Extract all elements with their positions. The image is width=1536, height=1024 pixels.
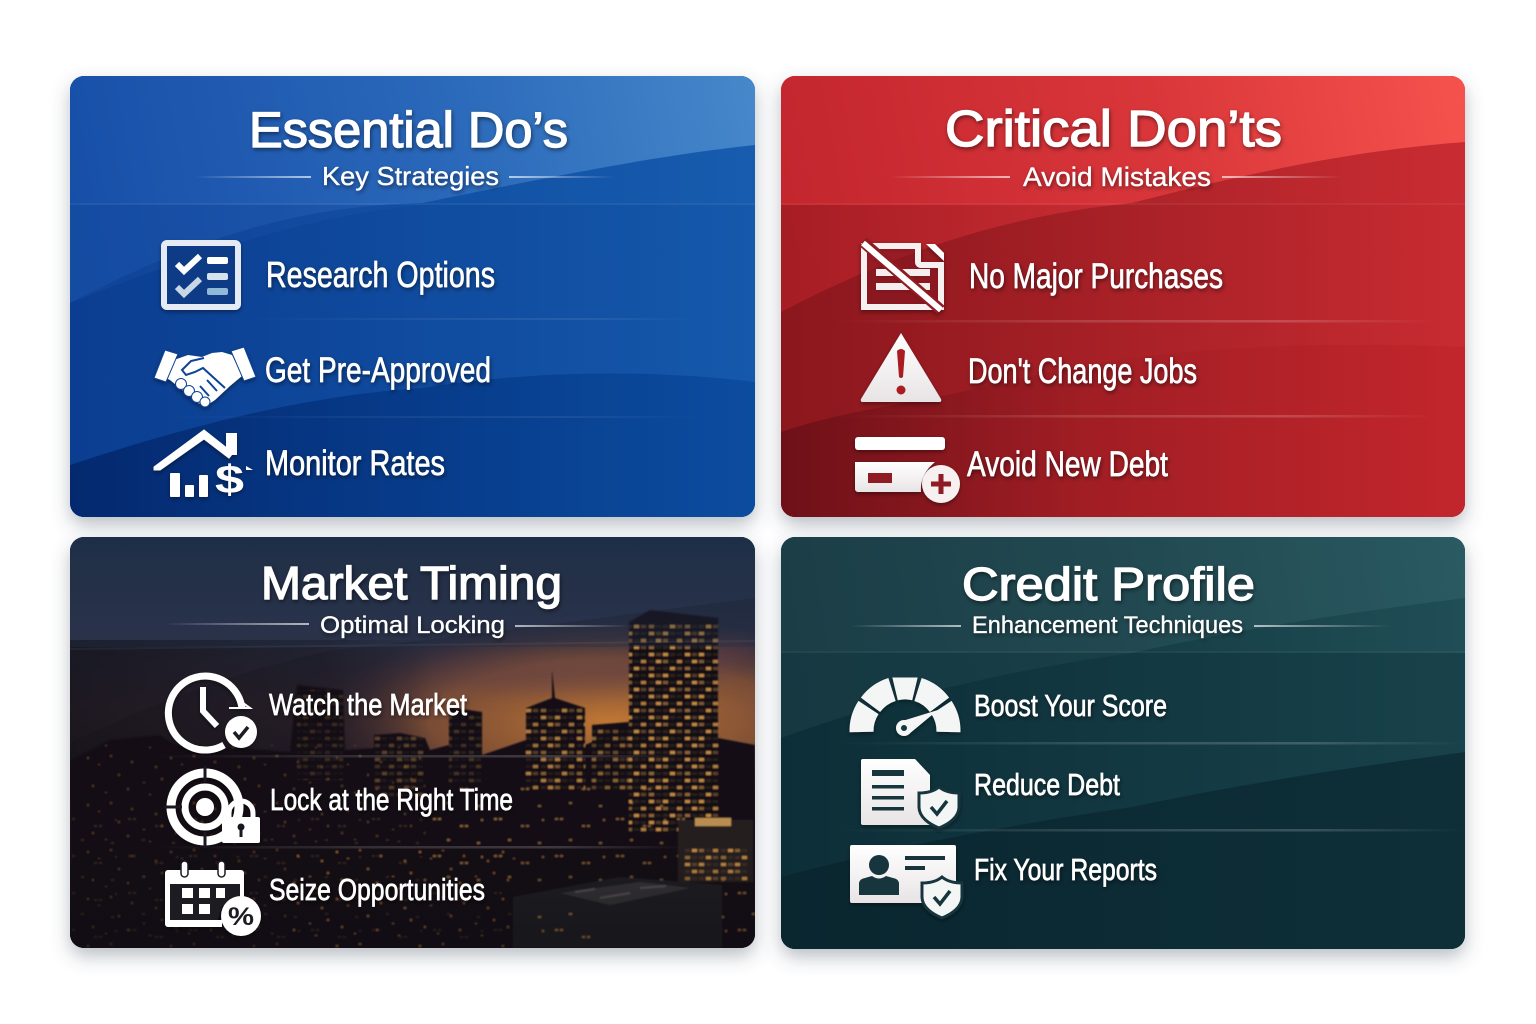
heading: Credit Profile: Credit Profile (962, 558, 1255, 610)
item: Reduce Debt: Reduce Debt (974, 767, 1120, 802)
icon: calendar with percent (165, 861, 261, 936)
panel: Critical Don'ts (781, 76, 1465, 517)
subheading: Key Strategies: Key Strategies (322, 161, 499, 191)
icon: target with padlock (164, 766, 260, 848)
icon: crossed-out document (863, 242, 944, 310)
icon: credit score gauge (861, 687, 949, 736)
icon: calendar with percent: % (228, 903, 254, 931)
item: Watch the Market: Watch the Market (269, 687, 467, 722)
city skyline photo (70, 537, 755, 948)
item: Lock at the Right Time: Lock at the Right Time (270, 782, 513, 817)
heading: Market Timing: Market Timing (261, 557, 562, 609)
item: Research Options: Research Options (266, 254, 495, 295)
icon: house with rates (154, 430, 253, 502)
item: Monitor Rates: Monitor Rates (265, 444, 445, 483)
subheading: Avoid Mistakes: Avoid Mistakes (1023, 162, 1211, 192)
item: Get Pre-Approved: Get Pre-Approved (265, 351, 491, 390)
panel: Essential Do's (70, 76, 755, 517)
subheading: Enhancement Techniques: Enhancement Techniques (972, 612, 1243, 639)
icon: handshake (154, 347, 256, 407)
item: Avoid New Debt: Avoid New Debt (967, 445, 1168, 484)
item: Fix Your Reports: Fix Your Reports (974, 852, 1157, 887)
icon: document with shield (861, 759, 959, 828)
icon: checklist (164, 243, 238, 307)
item: Boost Your Score: Boost Your Score (974, 688, 1167, 723)
panel: Credit Profile (781, 537, 1465, 949)
heading: Critical Don'ts: Critical Don’ts (945, 100, 1282, 157)
icon: warning triangle (861, 333, 941, 402)
item: Don't Change Jobs: Don't Change Jobs (968, 352, 1197, 391)
item: Seize Opportunities: Seize Opportunities (269, 872, 485, 907)
heading: Essential Do's: Essential Do’s (249, 102, 568, 158)
item: No Major Purchases: No Major Purchases (969, 257, 1223, 296)
icon: clock with check (168, 676, 257, 750)
icon: credit card with plus (855, 437, 960, 503)
icon: ID card with shield (850, 845, 962, 918)
panel: Market Timing (70, 537, 755, 948)
icon: house with rates: $ (215, 458, 244, 502)
subheading: Optimal Locking: Optimal Locking (320, 612, 505, 639)
